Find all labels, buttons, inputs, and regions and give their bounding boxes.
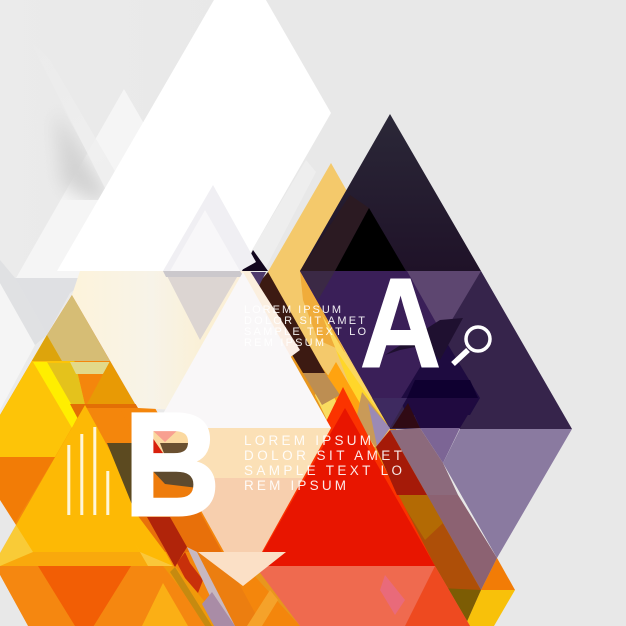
text block: lower caption: REM IPSUM (244, 478, 346, 493)
panel: pale translucent triangle (16, 89, 233, 278)
panel: right orange and yellow tip (465, 558, 515, 626)
grey shadow stripes (54, 124, 105, 200)
text block: lower caption: DOLOR SIT AMET (244, 448, 402, 463)
letter A shadow (385, 318, 463, 360)
panel: salmon lower band (255, 566, 470, 626)
panel: red triangle (255, 387, 435, 566)
panel: pale band right of white diamond (245, 160, 316, 275)
icon: magnifier (453, 327, 490, 364)
text block: upper caption (244, 304, 366, 349)
text block: lower caption: SAMPLE TEXT LO (244, 463, 402, 478)
panel: warm base of lower left (0, 295, 300, 626)
panel: dark brown band (242, 250, 340, 405)
panel: warm base under right centre (230, 271, 497, 626)
text block: upper caption: LOREM IPSUM (244, 304, 341, 316)
panel: dark purple diamond (300, 114, 572, 429)
text block: upper caption: DOLOR SIT AMET (244, 315, 365, 327)
panel: central diagonal orange band (107, 408, 300, 626)
panel: centre white diamond (155, 272, 331, 586)
panel: mauve band (390, 428, 497, 626)
panel: left yellow diamond (0, 295, 139, 523)
panel: lavender translucent triangle (163, 185, 256, 271)
text block: lower caption: LOREM IPSUM (244, 433, 371, 448)
text block: upper caption: SAMPLE TEXT LO (244, 326, 366, 338)
text block: upper caption: REM IPSUM (244, 337, 324, 349)
panel: cream translucent reflections (72, 271, 300, 412)
panel: lavender lower triangle (368, 403, 572, 558)
letter A: A (360, 252, 441, 394)
text block: lower caption (244, 433, 402, 493)
panel: left pale shards (0, 260, 90, 410)
panel: gold diamond (262, 163, 395, 448)
icon: bar chart lines (67, 427, 109, 515)
panel: large yellow triangle (0, 405, 173, 566)
letter B background holes (150, 428, 200, 498)
letter B: B (124, 383, 220, 547)
panel: big white diamond (57, 0, 331, 271)
panel: lower orange band (0, 566, 225, 626)
